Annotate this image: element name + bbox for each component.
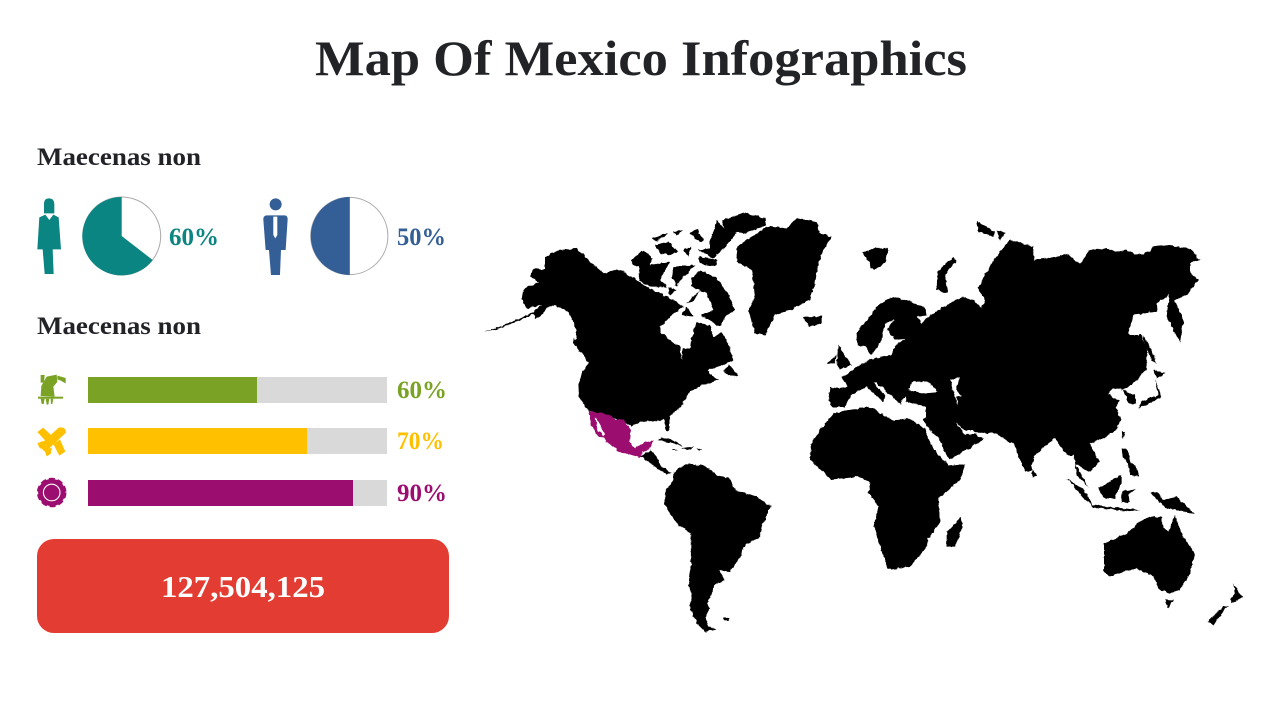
bar: green 60 percent bbox=[88, 377, 387, 403]
world map bbox=[484, 213, 1243, 632]
icon: woman bbox=[37, 198, 61, 274]
map: north america and greenland bbox=[484, 213, 852, 432]
value: 50 percent: 50% bbox=[397, 224, 446, 251]
value: yellow 70 percent: 70% bbox=[397, 428, 444, 455]
heading: gender section: Maecenas non bbox=[37, 144, 201, 171]
pie chart: 50 percent bbox=[311, 197, 388, 275]
value: 60 percent: 60% bbox=[169, 224, 219, 251]
icon: seal bbox=[38, 478, 66, 506]
pie chart: 60 percent bbox=[82, 197, 161, 275]
map: africa, south asia and oceania bbox=[810, 393, 1243, 625]
map: mexico highlight bbox=[588, 411, 654, 457]
value: green 60 percent: 60% bbox=[397, 377, 447, 404]
map: eurasia north bbox=[828, 221, 1200, 438]
icon: parrot bbox=[38, 375, 66, 405]
callout: population bbox=[37, 539, 449, 633]
panel: progress bars bbox=[37, 313, 447, 507]
title: Map Of Mexico Infographics bbox=[315, 30, 967, 86]
value: purple 90 percent: 90% bbox=[397, 480, 447, 507]
bar: purple 90 percent bbox=[88, 480, 387, 506]
map: central and south america bbox=[588, 411, 771, 632]
panel: gender statistics bbox=[37, 144, 446, 275]
heading: bars section: Maecenas non bbox=[37, 313, 201, 340]
icon: man bbox=[263, 198, 288, 275]
icon: airplane bbox=[37, 427, 66, 456]
bar: yellow 70 percent bbox=[88, 428, 387, 454]
callout: population: 127,504,125 bbox=[161, 569, 325, 604]
